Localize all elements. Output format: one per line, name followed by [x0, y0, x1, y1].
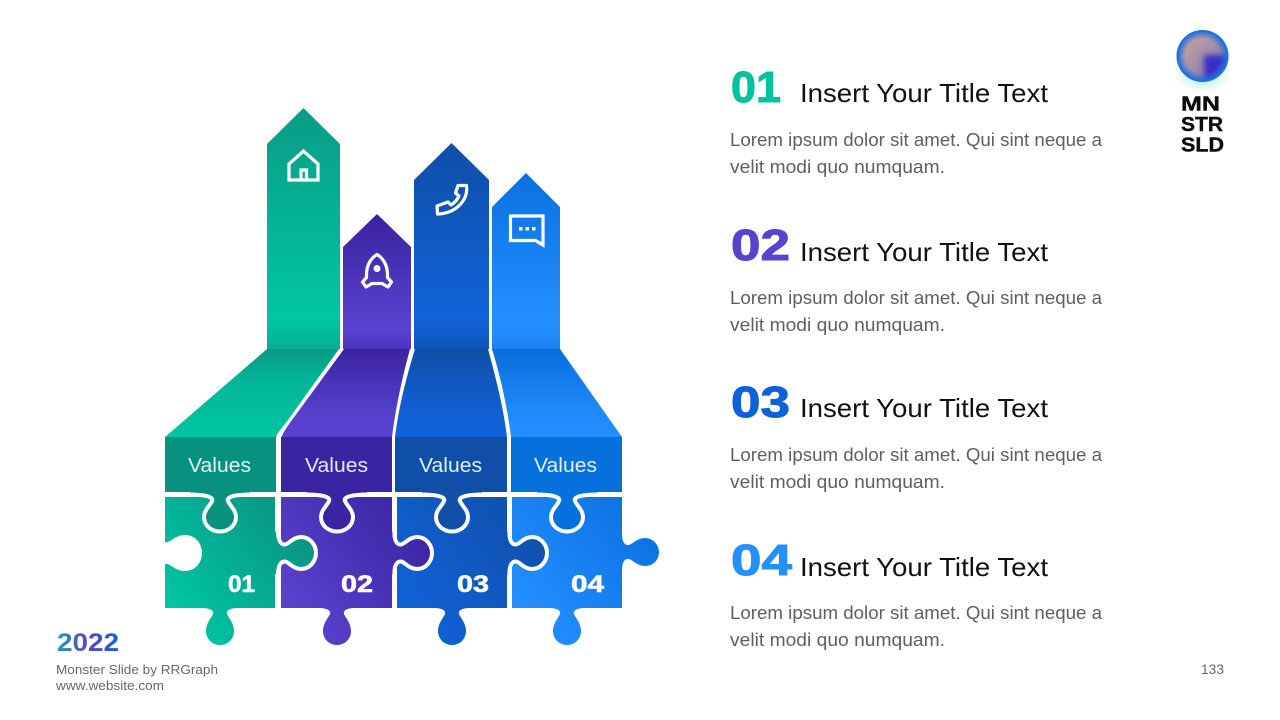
- footer credits: 2022: [57, 629, 119, 657]
- arrow 2 with rocket icon: [343, 214, 411, 349]
- text block 01: Insert Your Title Text: [800, 78, 1049, 108]
- side tab connectors: [274, 497, 547, 608]
- text block 02: Insert Your Title Text: [800, 237, 1049, 267]
- text block 02: 02: [731, 221, 790, 270]
- text block 04: 04: [731, 536, 793, 585]
- top tab connectors: [165, 490, 622, 532]
- panel: puzzle pieces: [164, 490, 659, 645]
- logo: SLD: [1181, 134, 1224, 156]
- puzzle piece 3: 03: [457, 571, 489, 598]
- footer credits: www.website.com: [55, 678, 164, 693]
- text block 03: velit modi quo numquam.: [730, 472, 945, 492]
- arrow 4 with chat icon: [492, 173, 560, 349]
- text block 01: 01: [731, 63, 781, 112]
- footer credits: Monster Slide by RRGraph: [56, 662, 218, 677]
- text block 04: Lorem ipsum dolor sit amet. Qui sint neque a: [730, 603, 1103, 623]
- text block 02: [730, 221, 1103, 335]
- text block 03: [730, 378, 1103, 492]
- icon: rocket: [362, 254, 392, 287]
- values box 1: [165, 437, 276, 492]
- values box 4: Values: [534, 455, 597, 477]
- arrow 3 with phone icon: [414, 143, 489, 349]
- text block 03: 03: [731, 378, 790, 427]
- text block 02: velit modi quo numquam.: [730, 315, 945, 335]
- page number: 133: [1201, 662, 1224, 677]
- text block 04: velit modi quo numquam.: [730, 630, 945, 650]
- icon: chat bubble: [510, 216, 543, 245]
- puzzle piece 4: [512, 497, 659, 645]
- icon: phone: [437, 186, 467, 214]
- icon: home: [289, 151, 318, 180]
- panel: values boxes: [165, 437, 622, 492]
- text block 03: Insert Your Title Text: [800, 393, 1049, 423]
- logo: STR: [1181, 113, 1223, 136]
- values box 2: Values: [305, 455, 368, 477]
- values box 3: Values: [419, 455, 482, 477]
- text block 02: Lorem ipsum dolor sit amet. Qui sint neque a: [730, 288, 1103, 308]
- values box 1: Values: [188, 455, 251, 477]
- logo: [1176, 30, 1230, 152]
- values box 3: [395, 437, 507, 492]
- text block 01: velit modi quo numquam.: [730, 157, 945, 177]
- text block 01: [730, 63, 1103, 177]
- panel: perspective bands: [165, 349, 622, 437]
- puzzle piece 3: [397, 497, 507, 645]
- puzzle piece 2: 02: [341, 571, 373, 598]
- arrow 1 with home icon: [267, 108, 340, 349]
- footer credits: [55, 629, 218, 693]
- puzzle piece 2: [281, 497, 392, 645]
- puzzle piece 1: 01: [228, 571, 255, 598]
- text block 04: Insert Your Title Text: [800, 552, 1049, 582]
- values box 4: [511, 437, 622, 492]
- logo: MN: [1181, 92, 1220, 116]
- panel: upward arrows: [267, 108, 560, 349]
- puzzle piece 4: 04: [571, 571, 605, 598]
- text block 03: Lorem ipsum dolor sit amet. Qui sint neque a: [730, 445, 1103, 465]
- puzzle piece 1: [164, 497, 275, 645]
- text block 01: Lorem ipsum dolor sit amet. Qui sint neque a: [730, 130, 1103, 150]
- values box 2: [281, 437, 392, 492]
- text block 04: [730, 536, 1103, 650]
